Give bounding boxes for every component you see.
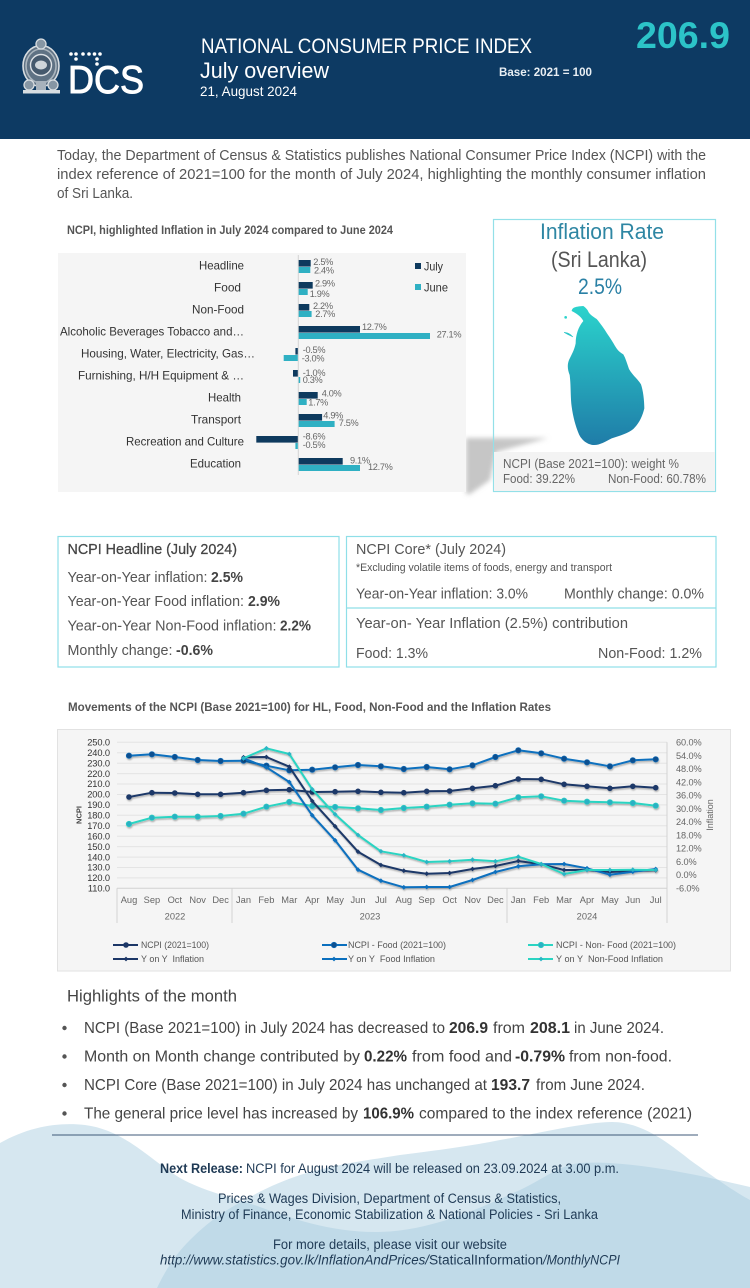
bar value labels: -3.0% (302, 354, 324, 364)
panel: NCPI core and contribution: Monthly change: 0.0% (564, 586, 704, 602)
category labels: Alcoholic Beverages Tobacco and… (60, 324, 244, 338)
month labels: Nov (189, 895, 206, 905)
headline index value: 206.9 (636, 15, 730, 56)
highlight 2: from non-food. (569, 1048, 672, 1066)
month labels: Mar (281, 895, 297, 905)
right axis labels (676, 738, 702, 894)
category labels: Food (214, 280, 241, 294)
panel: line chart: Inflation (705, 799, 715, 831)
left axis labels: 200.0 (87, 790, 110, 800)
highlight 1: from (493, 1020, 525, 1037)
month labels: Sep (144, 895, 160, 905)
panel: NCPI headline: 2.9% (248, 593, 280, 610)
month labels: Apr (305, 895, 319, 905)
right axis labels: 36.0% (676, 791, 702, 801)
panel: NCPI core and contribution: Non-Food: 1.2% (598, 645, 702, 662)
month labels: Oct (168, 895, 182, 905)
weights footer: Non-Food: 60.78% (608, 472, 706, 486)
left axis labels: 220.0 (87, 769, 110, 779)
category labels: Non-Food (192, 302, 244, 316)
website: StaticalInformation (429, 1252, 543, 1268)
bar value labels: 27.1% (437, 330, 461, 340)
next release: NCPI for August 2024 will be released on 23.09.2024 at 3.00 p.m. (246, 1161, 619, 1176)
left axis labels: 240.0 (87, 748, 110, 758)
month labels: May (326, 895, 344, 905)
bar value labels: 12.7% (362, 322, 387, 332)
month labels: Sep (418, 895, 435, 905)
bar value labels: 0.3% (303, 375, 323, 385)
bar chart heading: NCPI, highlighted Inflation in July 2024 compared to June 2024 (67, 225, 394, 237)
right axis labels: 18.0% (676, 830, 702, 840)
July bars (256, 260, 360, 465)
website (160, 1237, 620, 1268)
series: index lines (129, 750, 656, 824)
panel: NCPI headline: Monthly change: (68, 642, 172, 659)
month labels: Oct (442, 895, 457, 905)
highlight 1: NCPI (Base 2021=100) in July 2024 has decreased to (84, 1020, 445, 1037)
bar value labels: 1.9% (310, 289, 330, 299)
highlight 2: Month on Month change contributed by (84, 1048, 360, 1066)
left axis labels: 230.0 (87, 758, 110, 768)
panel: NCPI headline: -0.6% (176, 642, 213, 659)
website: For more details, please visit our website (273, 1237, 507, 1252)
rate value: 2.5% (578, 274, 622, 299)
right axis labels: 12.0% (676, 844, 702, 854)
month labels: Jan (236, 895, 251, 905)
chart legend: NCPI - Non- Food (2021=100) (556, 940, 676, 951)
right axis labels: 6.0% (676, 857, 697, 867)
highlight 4: compared to the index reference (2021) (419, 1106, 692, 1122)
right axis labels: 60.0% (676, 738, 702, 748)
month labels: Feb (533, 895, 549, 905)
chart legend: Y on Y Non-Food Inflation (556, 954, 663, 965)
highlight 2 (62, 1048, 672, 1066)
panel: NCPI core and contribution: Food: 1.3% (356, 645, 428, 662)
right axis labels: 24.0% (676, 817, 702, 827)
left axis labels: 140.0 (87, 852, 110, 862)
logo: emblem and DCS (23, 39, 144, 102)
left axis labels: 110.0 (88, 884, 110, 894)
panel: NCPI core and contribution: *Excluding volatile items of foods, energy and transport (356, 562, 612, 574)
bar value labels: 2.5% (313, 257, 333, 267)
panel: NCPI headline: 2.2% (280, 618, 311, 634)
panel: NCPI headline: Year-on-Year inflation: (68, 569, 208, 586)
bar value labels: 2.4% (314, 266, 334, 276)
category labels (60, 258, 255, 470)
bar value labels: 4.9% (323, 411, 343, 421)
icon: Sri Lanka map (564, 306, 644, 445)
bar value labels: 4.0% (322, 389, 342, 399)
right axis labels: -6.0% (676, 884, 700, 894)
highlight 1: 206.9 (449, 1020, 488, 1037)
month labels: 2023 (360, 912, 380, 922)
right axis labels: 54.0% (676, 751, 702, 761)
month labels: Jan (511, 895, 526, 905)
division credit: Ministry of Finance, Economic Stabilization & National Policies - Sri Lanka (181, 1207, 598, 1222)
month labels (121, 895, 662, 922)
category labels: Headline (199, 258, 244, 272)
month labels: Nov (464, 895, 481, 905)
highlight 3: from June 2024. (536, 1077, 645, 1094)
intro paragraph: index reference of 2021=100 for the month of July 2024, highlighting the monthly consumer inflation (57, 166, 706, 183)
month labels: Apr (580, 895, 594, 905)
bar value labels (302, 257, 461, 472)
header banner (0, 0, 750, 139)
left axis labels: 150.0 (87, 842, 110, 852)
left axis labels: 250.0 (87, 738, 110, 748)
right axis labels: 30.0% (676, 804, 702, 814)
category labels: Health (208, 390, 241, 404)
panel: NCPI core and contribution (346, 536, 716, 667)
weights footer: Food: 39.22% (503, 472, 575, 486)
weights footer: NCPI (Base 2021=100): weight % (503, 457, 679, 471)
bar value labels: 1.7% (308, 397, 328, 407)
left axis labels: 170.0 (87, 821, 110, 831)
panel: NCPI core and contribution: Year-on-Year inflation: 3.0% (356, 586, 528, 602)
panel: NCPI headline: Year-on-Year Non-Food inflation: (68, 618, 276, 634)
category labels: Recreation and Culture (126, 434, 244, 448)
base note: Base: 2021 = 100 (499, 65, 592, 79)
panel: NCPI headline: 2.5% (211, 569, 243, 586)
bar value labels: 2.7% (315, 309, 335, 319)
highlight 3: 193.7 (491, 1077, 530, 1094)
left axis labels: 120.0 (87, 873, 110, 883)
month labels: 2024 (577, 912, 597, 922)
axis titles: NCPI (74, 806, 84, 824)
division credit: Prices & Wages Division, Department of Census & Statistics, (218, 1191, 561, 1206)
month labels: Jun (625, 895, 640, 905)
month labels: Aug (396, 895, 412, 905)
panel: NCPI core and contribution: Year-on- Year Inflation (2.5%) contribution (356, 615, 628, 632)
highlight 2: -0.79% (515, 1048, 565, 1066)
panel: NCPI headline: NCPI Headline (July 2024) (68, 541, 237, 558)
month labels: May (601, 895, 619, 905)
month labels: Aug (121, 895, 137, 905)
chart legend: NCPI (2021=100) (141, 940, 209, 951)
intro paragraph: Today, the Department of Census & Statistics publishes National Consumer Price Index (NCPI) with the (57, 147, 706, 164)
category labels: Education (190, 456, 241, 470)
right axis labels: 0.0% (676, 870, 697, 880)
website: /MonthlyNCPI (542, 1252, 620, 1268)
legend (415, 260, 448, 294)
chart legend: Y on Y Food Inflation (348, 954, 435, 965)
left axis labels: 190.0 (87, 800, 110, 810)
footer text (160, 1161, 620, 1268)
highlights heading: Highlights of the month (67, 988, 237, 1006)
left axis labels (87, 738, 110, 894)
highlight 2: from food and (412, 1048, 512, 1066)
right axis labels: 42.0% (676, 777, 702, 787)
intro paragraph (57, 147, 706, 202)
category labels: Housing, Water, Electricity, Gas… (81, 346, 255, 360)
bar value labels: -0.5% (303, 345, 325, 355)
highlight 1: 208.1 (530, 1020, 570, 1037)
bar value labels: -1.0% (303, 368, 325, 378)
bar value labels: -8.6% (303, 431, 325, 441)
line chart heading: Movements of the NCPI (Base 2021=100) for HL, Food, Non-Food and the Inflation Rates (68, 700, 551, 714)
highlight 1: in June 2024. (574, 1020, 664, 1037)
panel: NCPI headline (58, 536, 339, 667)
right axis labels: 48.0% (676, 764, 702, 774)
category labels: Furnishing, H/H Equipment & … (78, 368, 244, 382)
legend: July (424, 260, 443, 274)
left axis labels: 180.0 (87, 810, 110, 820)
panel: bar chart (58, 253, 466, 492)
chart legend (113, 940, 676, 965)
weights footer (494, 452, 715, 491)
month labels: Mar (556, 895, 572, 905)
intro paragraph: of Sri Lanka. (57, 185, 133, 202)
website: http://www.statistics.gov.lk/InflationAndPrices/ (160, 1252, 430, 1268)
month labels: 2022 (165, 912, 185, 922)
subtitle: July overview (200, 58, 329, 83)
month labels: Jun (350, 895, 366, 905)
highlight 3: NCPI Core (Base 2021=100) in July 2024 has unchanged at (84, 1077, 488, 1094)
bar value labels: 9.1% (350, 456, 370, 466)
left axis labels: 210.0 (87, 779, 110, 789)
month labels: Dec (487, 895, 504, 905)
highlight 4: The general price level has increased by (84, 1106, 358, 1122)
highlight 4 (62, 1106, 692, 1122)
background waves (0, 1122, 750, 1288)
division credit (181, 1191, 598, 1222)
title: NATIONAL CONSUMER PRICE INDEX (201, 35, 532, 58)
panel: line chart (58, 730, 730, 971)
month labels: Dec (212, 895, 229, 905)
heading: Inflation Rate (540, 219, 664, 244)
month labels: Jul (375, 895, 387, 905)
panel: NCPI headline: Year-on-Year Food inflation: (68, 593, 244, 610)
June bars (284, 267, 430, 471)
logo: emblem and DCS: DCS (68, 59, 144, 102)
bar value labels: 12.7% (368, 462, 393, 472)
highlight 1 (62, 1020, 664, 1037)
highlight 2: 0.22% (364, 1048, 407, 1066)
panel: inflation rate (494, 219, 716, 492)
bar value labels: 2.9% (315, 278, 335, 288)
next release: Next Release: (160, 1161, 243, 1176)
panel shadow (466, 438, 548, 494)
chart legend: NCPI - Food (2021=100) (348, 940, 446, 951)
date: 21, August 2024 (200, 83, 297, 99)
bar value labels: 2.2% (313, 301, 333, 311)
highlight 4: 106.9% (363, 1106, 414, 1122)
bar value labels: -0.5% (303, 440, 325, 450)
series: inflation lines (244, 748, 656, 887)
left axis labels: 130.0 (87, 863, 110, 873)
highlights list (62, 1020, 692, 1122)
month labels: Feb (258, 895, 274, 905)
left axis labels: 160.0 (87, 831, 110, 841)
month labels: Jul (650, 895, 662, 905)
country: (Sri Lanka) (551, 247, 647, 272)
bar value labels: 7.5% (339, 418, 359, 428)
legend: June (424, 280, 448, 294)
chart legend: Y on Y Inflation (141, 954, 204, 965)
category labels: Transport (191, 412, 242, 426)
panel: NCPI core and contribution: NCPI Core* (July 2024) (356, 541, 506, 558)
